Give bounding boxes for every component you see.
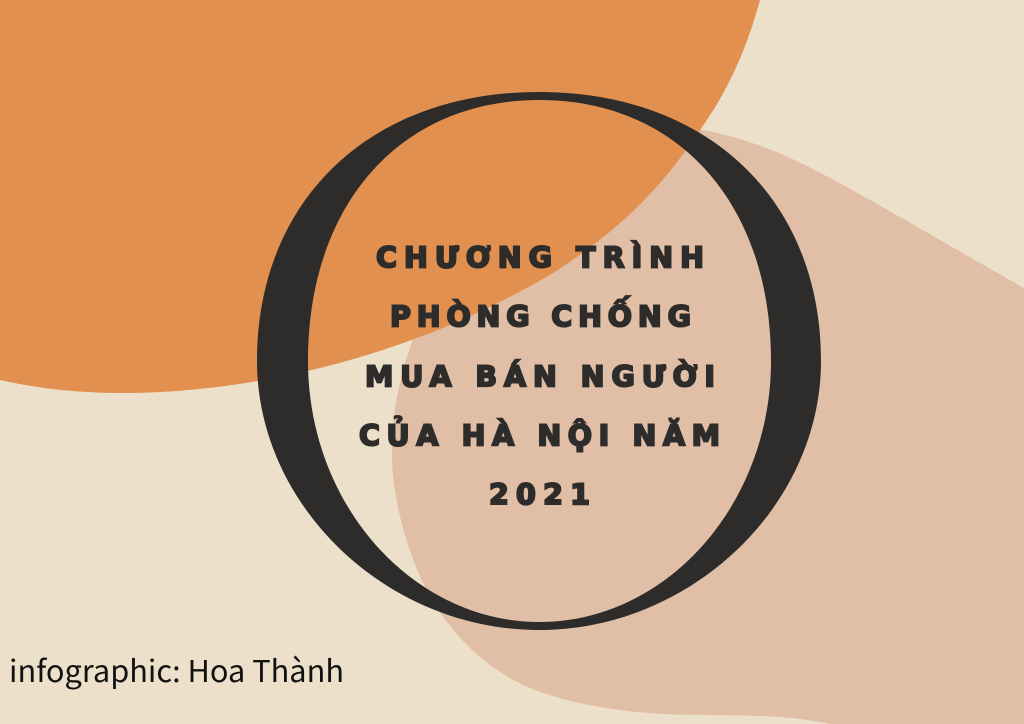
- orange blob: [0, 0, 760, 393]
- title line 5: 2021: [489, 478, 590, 512]
- title line 4: CỦA HÀ NỘI NĂM: [359, 414, 720, 452]
- credit: infographic: Hoa Thành: [9, 647, 344, 691]
- title: [359, 240, 720, 512]
- large letter O ring: [257, 92, 821, 630]
- title line 1: CHƯƠNG TRÌNH: [376, 240, 704, 274]
- title line 3: MUA BÁN NGƯỜI: [365, 360, 715, 394]
- peach blob: [392, 128, 1024, 724]
- title line 2: PHÒNG CHỐNG: [390, 296, 691, 334]
